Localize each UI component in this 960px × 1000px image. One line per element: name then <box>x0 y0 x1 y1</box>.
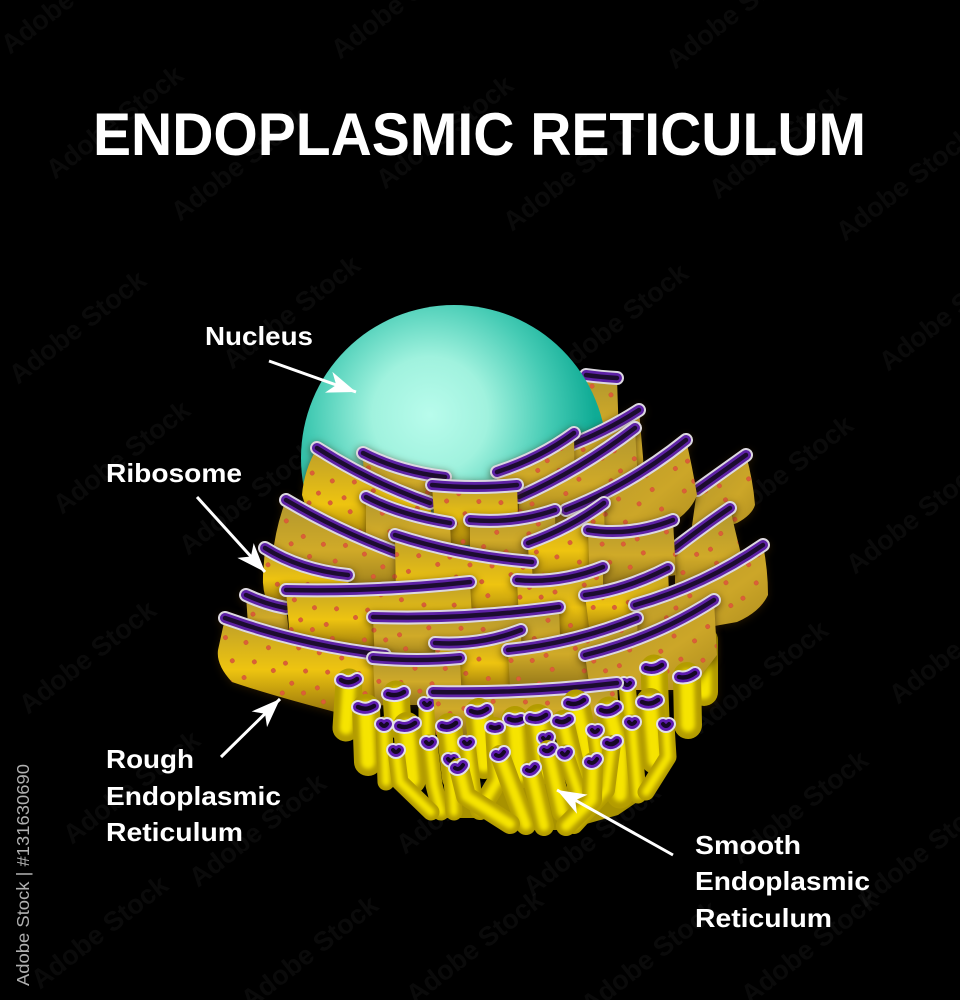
sheet <box>588 520 676 590</box>
label: Smooth Endoplasmic Reticulum: Reticulum <box>695 903 832 933</box>
tubule <box>646 665 662 745</box>
arrow: smooth ER <box>557 790 673 855</box>
tubule <box>574 741 617 825</box>
stock watermark: Adobe Stock <box>47 394 197 520</box>
stock watermark: Adobe Stock <box>40 59 190 185</box>
label: Nucleus: Nucleus <box>205 321 313 351</box>
tubule <box>464 742 474 800</box>
stock watermark: Adobe Stock <box>3 264 153 390</box>
large front left sheet <box>218 618 385 712</box>
tubule <box>624 683 636 780</box>
tubule <box>442 723 456 778</box>
tubule <box>496 752 526 825</box>
rough endoplasmic reticulum sheets <box>218 410 768 712</box>
label: Rough Endoplasmic Reticulum: Reticulum <box>106 817 243 847</box>
tubule <box>642 700 658 760</box>
tubule <box>480 727 499 810</box>
tubule behind right sheets <box>690 640 718 692</box>
stock watermark: Adobe Stock <box>725 744 875 870</box>
last sheet in front of tubules <box>433 683 620 735</box>
tubule <box>393 750 431 812</box>
sheet <box>470 510 556 570</box>
stock watermark: Adobe Stock <box>710 409 860 535</box>
tubule <box>562 752 579 795</box>
sheet <box>508 618 640 690</box>
sheet with ribosome arrow <box>263 548 350 605</box>
tubule <box>341 679 357 728</box>
sheet <box>585 600 717 690</box>
sheet <box>519 428 640 540</box>
sheet <box>286 582 473 650</box>
tubule feet mass <box>420 780 640 830</box>
stock watermark: Adobe Stock <box>497 111 647 237</box>
sheet <box>690 455 755 540</box>
tubule <box>629 722 638 795</box>
stock watermark: Adobe Stock <box>703 79 853 205</box>
stock watermark: Adobe Stock <box>13 594 163 720</box>
sheet <box>432 485 519 545</box>
tubule <box>566 759 597 826</box>
stock watermark: Adobe Stock <box>57 724 207 850</box>
smooth endoplasmic reticulum tubules <box>341 665 695 830</box>
sheet <box>435 630 522 690</box>
tubule <box>568 700 590 770</box>
stock watermark: Adobe Stock <box>217 249 367 375</box>
tubule <box>455 765 510 824</box>
sheet <box>363 453 448 510</box>
stock watermark: Adobe Stock <box>183 767 333 893</box>
tubule <box>601 707 620 795</box>
arrow: nucleus <box>269 361 356 392</box>
tubule <box>399 723 415 780</box>
label: Ribosome: Ribosome <box>106 458 242 488</box>
tubule <box>509 719 521 775</box>
tubule <box>592 730 603 790</box>
tubule <box>557 719 578 785</box>
tubule <box>544 748 562 812</box>
tubule <box>381 724 387 782</box>
sheet <box>585 568 670 635</box>
tubule <box>646 724 669 792</box>
tubule <box>426 742 441 812</box>
sheet <box>274 500 413 600</box>
sheet <box>565 410 645 500</box>
tubule <box>530 715 546 770</box>
sheet <box>566 440 697 550</box>
nucleus <box>301 305 607 611</box>
tubule <box>388 692 404 725</box>
arrow: rough ER <box>221 699 280 757</box>
sheet <box>366 497 452 565</box>
sheet <box>497 433 575 515</box>
tubule <box>424 703 430 745</box>
arrow: ribosome <box>197 497 265 572</box>
tubule <box>358 706 374 762</box>
sheet <box>517 567 603 640</box>
tubule <box>679 673 695 725</box>
sheet <box>373 607 561 665</box>
sheet <box>675 508 740 605</box>
tubule <box>543 737 556 790</box>
side credit text: Adobe Stock | #131630690 <box>13 764 33 986</box>
stock watermark: Adobe Stock <box>370 69 520 195</box>
tubule <box>527 767 544 826</box>
stock watermark: Adobe Stock <box>165 101 315 227</box>
tubule <box>471 709 487 765</box>
title: ENDOPLASMIC RETICULUM <box>93 101 866 168</box>
sheet <box>246 595 290 640</box>
back membrane sheet behind nucleus <box>586 375 620 470</box>
sheet <box>302 448 436 550</box>
sheet <box>373 658 462 705</box>
label: Rough Endoplasmic Reticulum: Rough <box>106 744 194 774</box>
stock watermark: Adobe Stock <box>545 257 695 383</box>
stock watermark: Adobe Stock <box>25 869 175 995</box>
stock watermark: Adobe Stock <box>685 614 835 740</box>
sheet <box>635 545 768 640</box>
label: Rough Endoplasmic Reticulum: Endoplasmic <box>106 781 281 811</box>
tubule <box>448 759 454 812</box>
sheet <box>528 503 606 590</box>
label: Smooth Endoplasmic Reticulum: Smooth <box>695 830 801 860</box>
stock watermark: Adobe Stock <box>517 776 667 902</box>
stock watermark: Adobe Stock <box>390 734 540 860</box>
stock watermark: Adobe Stock <box>173 435 323 561</box>
sheet <box>395 535 534 625</box>
label: Smooth Endoplasmic Reticulum: Endoplasmic <box>695 866 870 896</box>
